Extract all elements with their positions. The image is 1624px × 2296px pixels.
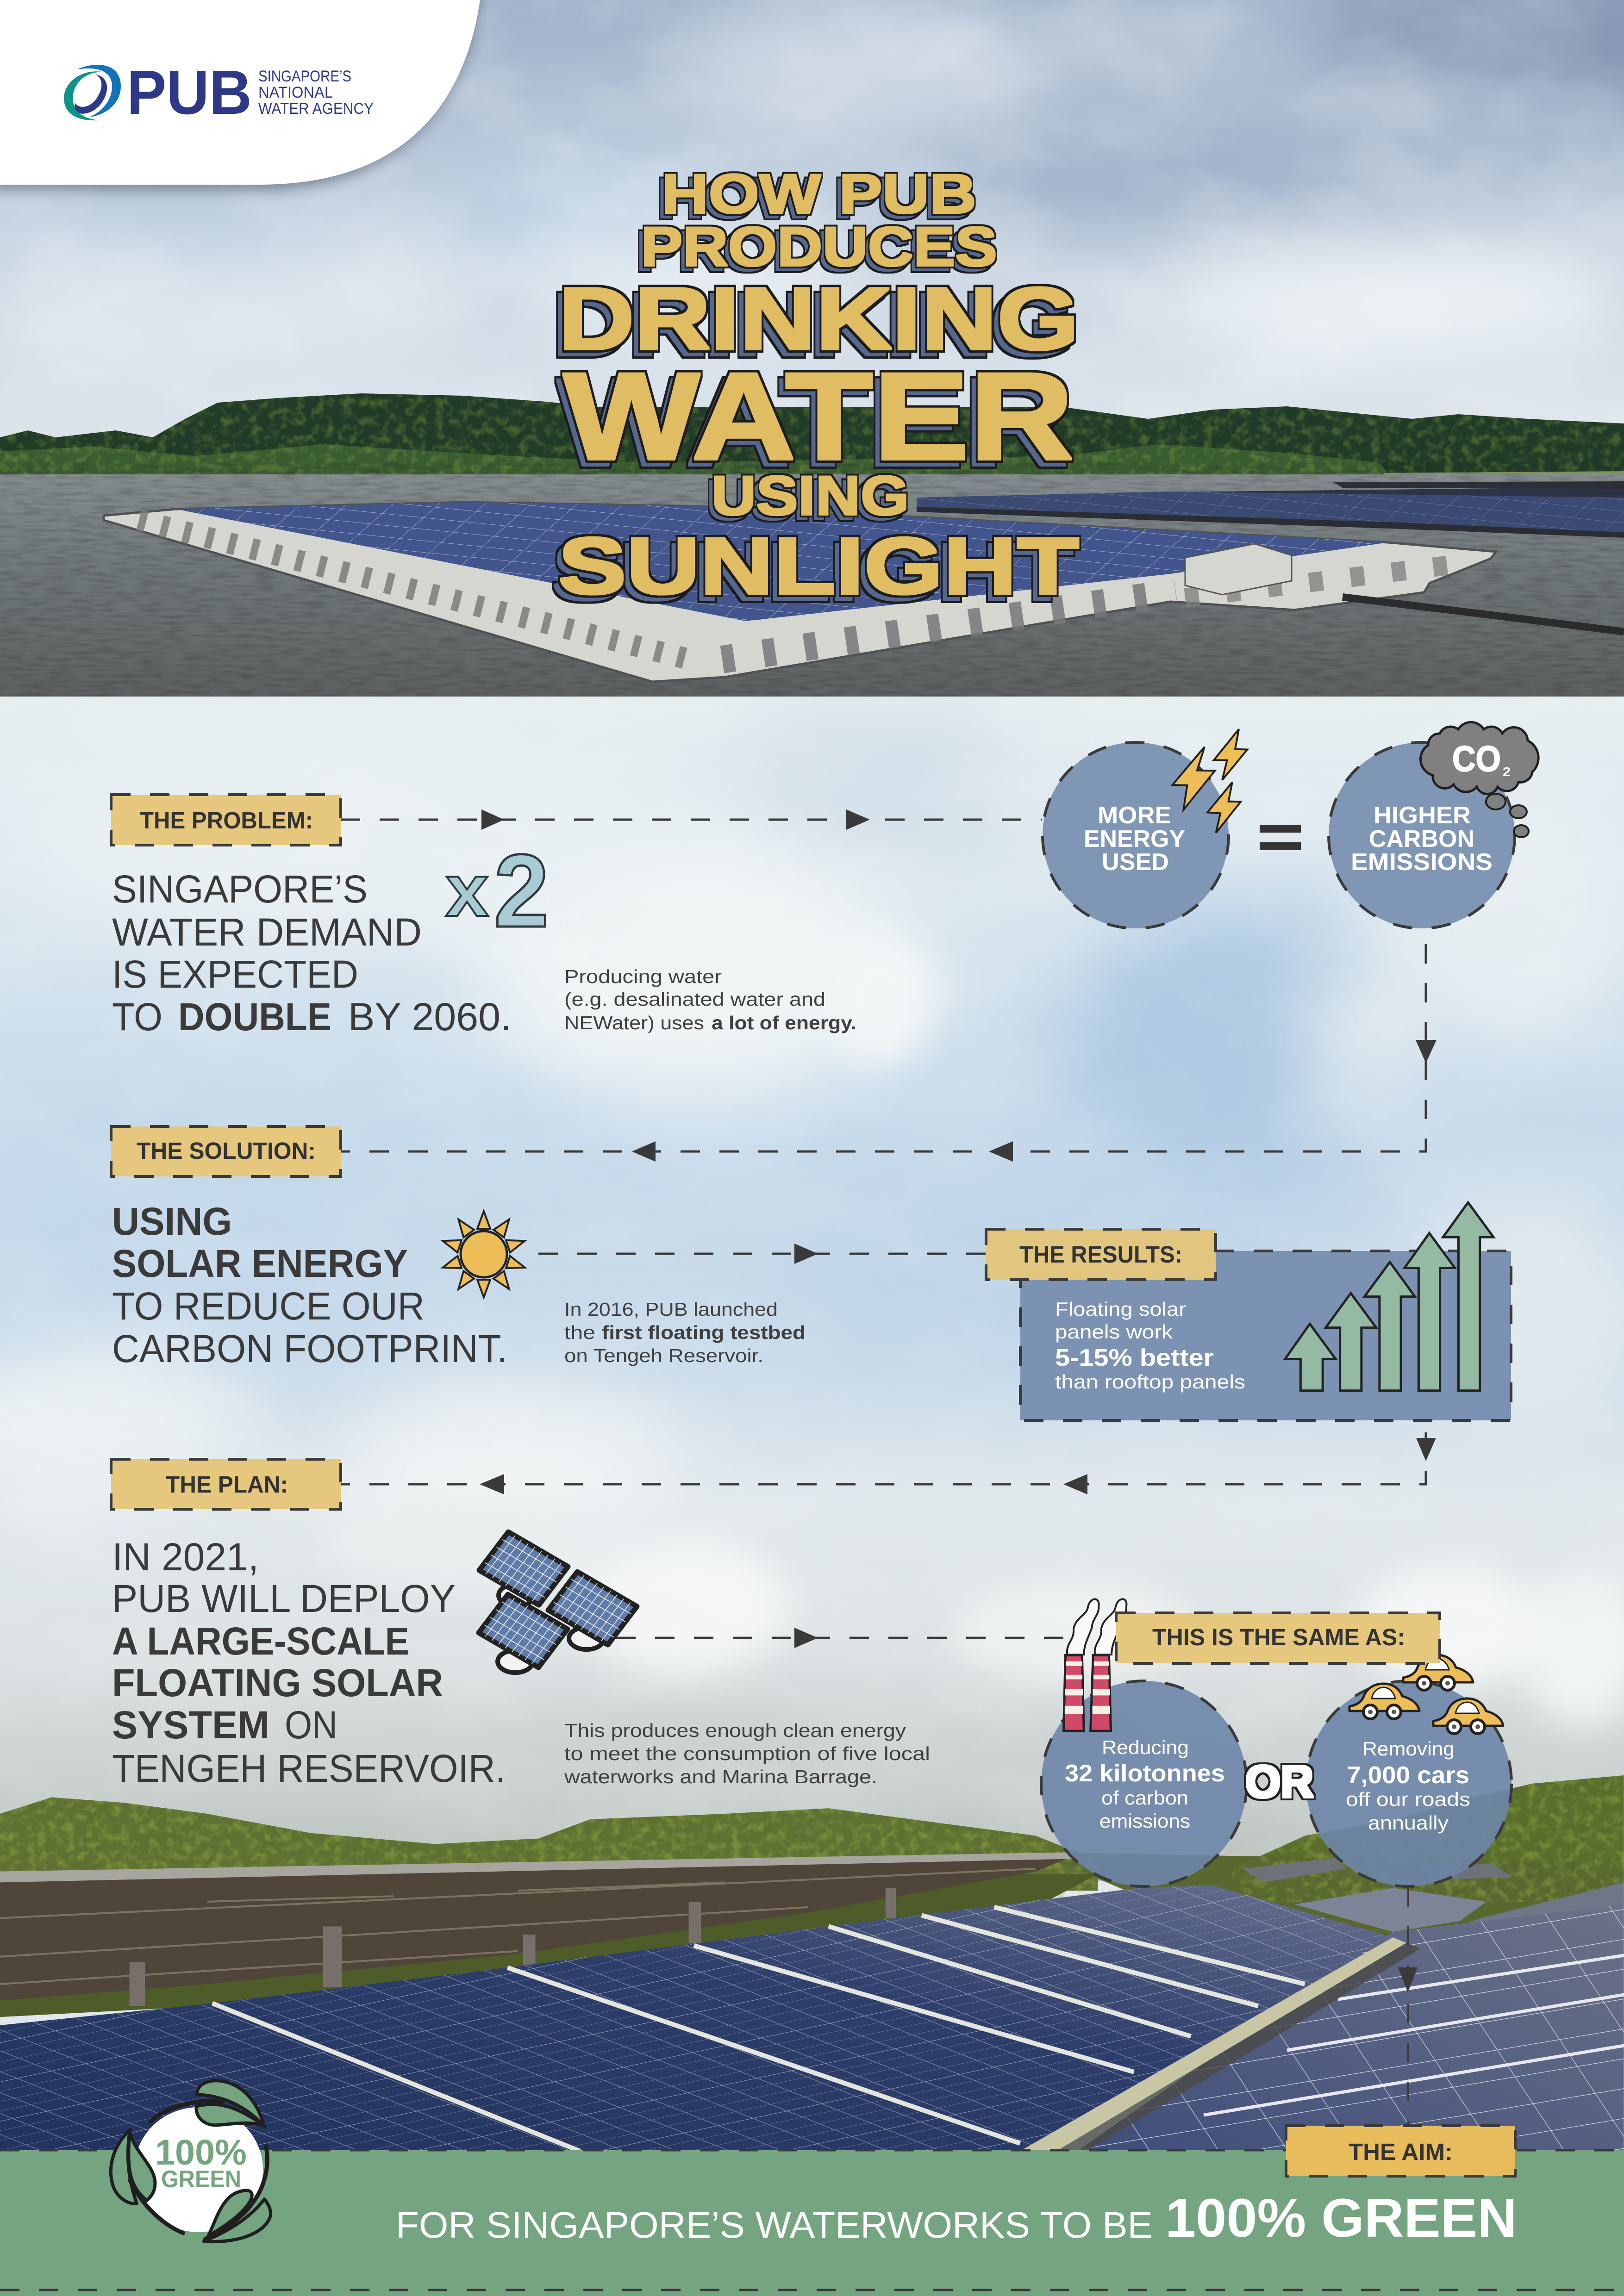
- title line: sunlight: SUNLIGHT: [558, 522, 1079, 610]
- module separators: [212, 1907, 1305, 2151]
- far roof: [1294, 1888, 1486, 1932]
- plan statement: IN 2021,: [112, 1535, 259, 1579]
- title line: how pub: HOW PUB: [662, 163, 976, 225]
- icon: CO2 cloud: [1420, 722, 1538, 837]
- main array cell lines: [0, 1885, 1393, 2151]
- background: sky mid section: [0, 697, 1624, 1881]
- title line: water: WATER: [563, 347, 1074, 485]
- PUB logo rings: [64, 65, 121, 120]
- logo tagline: NATIONAL: [258, 84, 333, 101]
- junction box: [1185, 544, 1292, 595]
- arrow 5: [1443, 1202, 1493, 1391]
- stack 1 bands: [1065, 1661, 1083, 1714]
- title line: drinking: DRINKING: [558, 270, 1079, 368]
- flow line: panels to same-as: [616, 1628, 1065, 1648]
- CO2 text: CO: [1452, 738, 1501, 779]
- arrowhead left: [1063, 1474, 1087, 1494]
- note: testbed: first floating testbed: [602, 1322, 806, 1343]
- label text: THIS IS THE SAME AS:: [1152, 1624, 1405, 1650]
- flow line: cars to aim: [1398, 1887, 1418, 2126]
- arrowhead: [794, 1628, 818, 1648]
- flow line: emissions to solution: [341, 944, 1437, 1162]
- raft far 2: [1176, 487, 1624, 500]
- plan statement: PUB WILL DEPLOY: [112, 1577, 456, 1620]
- clouds: [0, 0, 1624, 375]
- plan statement: FLOATING SOLAR: [112, 1661, 443, 1705]
- green band: [0, 2150, 1624, 2296]
- label box: [1286, 2126, 1515, 2176]
- array rail: [1020, 1937, 1406, 2151]
- label box: [986, 1229, 1216, 1280]
- label box: [1116, 1613, 1440, 1663]
- icon: car: [1433, 1699, 1503, 1734]
- circle text: emissions: [1099, 1810, 1190, 1832]
- label text: THE RESULTS:: [1019, 1241, 1182, 1268]
- leaf top inner: [196, 2104, 264, 2126]
- sun disc: [461, 1231, 507, 1277]
- dashes: [616, 1636, 1065, 1639]
- label box: [111, 1459, 341, 1509]
- solution statement: TO REDUCE OUR: [112, 1284, 425, 1328]
- panel 3: [479, 1594, 568, 1668]
- panel 1: [479, 1532, 568, 1605]
- note: energy use: (e.g. desalinated water and: [564, 989, 825, 1010]
- arrowhead left: [989, 1141, 1013, 1162]
- circle text: HIGHER: [1374, 802, 1471, 829]
- circle text: CARBON: [1369, 826, 1474, 852]
- main solar array: [0, 1885, 1393, 2151]
- note: clean energy: This produces enough clean energy: [564, 1720, 906, 1741]
- arrowhead: [794, 1244, 818, 1264]
- icon: x2: [445, 833, 549, 949]
- results text: 5-15% better: [1055, 1344, 1214, 1371]
- distant array: [1450, 1882, 1624, 1929]
- raft far 1: [917, 492, 1624, 532]
- circle text: annually: [1368, 1812, 1449, 1834]
- aim statement: FOR SINGAPORE’S WATERWORKS TO BE: [396, 2204, 1153, 2246]
- circle text: Reducing: [1102, 1736, 1189, 1758]
- icon: car: [1403, 1655, 1473, 1690]
- subscript: 2: [1503, 765, 1511, 779]
- arrowhead down: [1398, 1967, 1418, 1992]
- circle text: off our roads: [1346, 1788, 1470, 1810]
- dashes: [341, 1432, 1426, 1484]
- problem statement: SINGAPORE’S: [112, 867, 368, 911]
- swoosh left: [130, 2180, 183, 2233]
- label text: THE AIM:: [1349, 2139, 1453, 2165]
- arrowhead down: [1416, 1040, 1437, 1063]
- raft far 1 edge: [917, 507, 1624, 538]
- label: the plan: [111, 1459, 341, 1509]
- x: x: [445, 849, 489, 932]
- problem statement: IS EXPECTED: [112, 952, 358, 996]
- logo panel shadow: [0, 0, 480, 189]
- circle text: of carbon: [1101, 1787, 1188, 1809]
- background: solar farm photo: [0, 1773, 1624, 2151]
- bolt: [1173, 747, 1215, 810]
- problem statement: BY 2060.: [348, 995, 512, 1039]
- floating panel grid: [176, 502, 1388, 621]
- icon: lightning: [1173, 729, 1247, 833]
- badge green: GREEN: [161, 2166, 241, 2193]
- arrowhead left: [480, 1474, 504, 1494]
- note: testbed: on Tengeh Reservoir.: [564, 1345, 763, 1366]
- distant shelter: [1243, 1858, 1512, 1882]
- arrow 4: [1405, 1233, 1455, 1391]
- cloud texture: [0, 0, 1624, 477]
- circle: higher carbon emissions: [1329, 722, 1538, 928]
- circle text: EMISSIONS: [1351, 849, 1493, 876]
- raft far 3: [1333, 481, 1624, 489]
- leaves: [111, 2081, 270, 2242]
- underside beams: [0, 1869, 1036, 1984]
- logo panel: [0, 0, 480, 189]
- leaf left inner: [129, 2130, 155, 2201]
- problem statement: WATER DEMAND: [112, 910, 422, 954]
- hills right: [1232, 1775, 1624, 1902]
- cable: [1343, 597, 1624, 632]
- smoke: [1095, 1599, 1126, 1655]
- blue ring: [77, 65, 121, 117]
- puff: [1510, 805, 1527, 818]
- panel top edge: [0, 1852, 1072, 1882]
- hill foliage: [0, 444, 1389, 474]
- sun rays: [441, 1211, 527, 1297]
- circle text: MORE: [1098, 802, 1171, 829]
- PUB wordmark: PUB: [127, 57, 252, 127]
- results text: Floating solar: [1055, 1298, 1186, 1320]
- hill texture: [0, 391, 1624, 477]
- raft far 1 cells: [917, 492, 1624, 532]
- arrowhead left: [632, 1141, 656, 1162]
- logo tagline: WATER AGENCY: [258, 100, 374, 118]
- clouds white lower: [324, 935, 1624, 1800]
- teal ring: [64, 71, 104, 120]
- dashes: [1407, 1887, 1409, 2126]
- far rafts: [917, 481, 1624, 538]
- panel 2: [548, 1572, 637, 1645]
- note: testbed: In 2016, PUB launched: [564, 1299, 778, 1320]
- label: the problem: [111, 795, 341, 845]
- circle text: 7,000 cars: [1347, 1762, 1469, 1789]
- problem statement: DOUBLE: [178, 995, 331, 1039]
- far bank: [1384, 471, 1624, 477]
- panel base: [569, 1627, 604, 1649]
- stack 2 bands: [1093, 1661, 1110, 1714]
- arrowhead: [846, 809, 870, 830]
- logo tagline: SINGAPORE’S: [258, 68, 351, 85]
- circle: more energy used: [1043, 729, 1247, 928]
- badge disc: [134, 2107, 263, 2232]
- disc: [1329, 742, 1515, 928]
- results text: than rooftop panels: [1055, 1371, 1245, 1393]
- circle text: USED: [1102, 849, 1169, 876]
- plan statement: SYSTEM: [112, 1703, 269, 1747]
- plan statement: A LARGE-SCALE: [112, 1619, 409, 1663]
- label box: [111, 1126, 341, 1176]
- title: [558, 163, 1079, 610]
- note: energy use: Producing water: [564, 966, 722, 987]
- hills left: [0, 1797, 1098, 1891]
- right pontoons: [722, 592, 1176, 660]
- panel base: [499, 1584, 534, 1606]
- circle: reducing carbon: [1041, 1599, 1247, 1886]
- hill texture: [0, 1773, 1624, 1944]
- smoke: [1067, 1599, 1099, 1655]
- icon: solar panels: [479, 1532, 637, 1673]
- right array grid: [1077, 1904, 1624, 2151]
- circle text: Removing: [1362, 1738, 1455, 1760]
- icon: car: [1349, 1684, 1419, 1719]
- support posts: [130, 1888, 896, 2006]
- circle text: ENERGY: [1084, 826, 1185, 852]
- cloud texture mid: [0, 697, 1624, 1807]
- clouds mid: [0, 708, 1624, 1550]
- plan statement: ON: [285, 1703, 337, 1747]
- cloud: [1420, 722, 1538, 794]
- bolt: [1214, 729, 1247, 780]
- arrow 2: [1326, 1293, 1376, 1391]
- circle text: 32 kilotonnes: [1065, 1760, 1225, 1787]
- label: this is the same as: [1116, 1613, 1440, 1663]
- right solar array: [1077, 1904, 1624, 2151]
- puff: [1514, 825, 1529, 837]
- icon: smokestacks: [1063, 1599, 1126, 1731]
- problem statement: TO: [112, 995, 162, 1039]
- arrowhead: [481, 809, 504, 830]
- background: reservoir photo: [0, 0, 1624, 697]
- swoosh top: [150, 2101, 223, 2122]
- panel: the results: [986, 1202, 1511, 1420]
- solution statement: USING: [112, 1200, 232, 1243]
- sky: [0, 0, 1624, 481]
- flow line: problem to energy: [341, 809, 1042, 830]
- label text: THE PLAN:: [166, 1471, 288, 1498]
- floating panels: [176, 502, 1388, 621]
- label: the solution: [111, 1126, 341, 1176]
- water ripples: [0, 477, 1624, 697]
- left pontoons: [139, 520, 690, 660]
- solution statement: SOLAR ENERGY: [112, 1242, 408, 1285]
- disc: [1306, 1681, 1512, 1886]
- sky gradient: [0, 697, 1624, 1881]
- plan statement: TENGEH RESERVOIR.: [112, 1747, 506, 1790]
- OR text: OR: [1245, 1756, 1313, 1807]
- navy crescent: [75, 75, 107, 114]
- leaf bottom outer: [204, 2199, 270, 2242]
- right array bands: [1204, 1955, 1624, 2115]
- swoosh right: [205, 2146, 267, 2239]
- floating platform frame: [104, 502, 1496, 682]
- disc: [1043, 742, 1229, 928]
- results box: [1020, 1251, 1511, 1420]
- arrow 3: [1364, 1262, 1415, 1391]
- title line: using: USING: [711, 465, 909, 527]
- appended pontoons: [1185, 562, 1472, 598]
- note: energy use: a lot of energy.: [712, 1012, 856, 1033]
- logo panel white: [0, 0, 480, 185]
- equals sign: [1260, 825, 1301, 850]
- leaf left: [111, 2130, 137, 2203]
- title line: produces: PRODUCES: [641, 216, 997, 278]
- leaf bottom: [208, 2190, 252, 2236]
- icon: rising arrows: [1285, 1202, 1493, 1391]
- stack 1: [1063, 1655, 1084, 1731]
- disc: [1041, 1681, 1247, 1886]
- flow line: results to plan: [341, 1432, 1436, 1494]
- stack 2: [1091, 1655, 1111, 1731]
- bolt: [1207, 782, 1241, 833]
- flow line: sun to results: [538, 1244, 986, 1264]
- 2: 2: [494, 833, 549, 949]
- label text: THE SOLUTION:: [137, 1138, 316, 1164]
- leaf top: [197, 2081, 264, 2127]
- note: energy use: NEWater) uses: [564, 1012, 704, 1033]
- hills: [0, 393, 1624, 477]
- dashes: [538, 1252, 986, 1255]
- icon: sun: [441, 1211, 527, 1297]
- panel underside: [0, 1857, 1072, 2001]
- badge: 100% green: [111, 2081, 270, 2242]
- panel base: [498, 1650, 533, 1673]
- arrowhead down: [1416, 1438, 1436, 1461]
- water: [0, 474, 1624, 697]
- hill backfill: [1036, 1852, 1624, 1946]
- arrow 1: [1285, 1324, 1336, 1391]
- puff: [1486, 794, 1505, 809]
- note: clean energy: waterworks and Marina Barrage.: [564, 1766, 877, 1787]
- rail shadow: [1056, 1943, 1421, 2151]
- badge 100%: 100%: [155, 2133, 247, 2172]
- dashes: [341, 818, 1042, 821]
- circle: removing cars: [1306, 1655, 1512, 1886]
- note: testbed: the: [564, 1322, 595, 1343]
- results text: panels work: [1055, 1321, 1173, 1343]
- solution statement: CARBON FOOTPRINT.: [112, 1327, 507, 1370]
- label text: THE PROBLEM:: [140, 807, 313, 834]
- vegetation below panels: [0, 1874, 1098, 2017]
- band dashes: [0, 2150, 1624, 2290]
- label box: [111, 795, 341, 845]
- panel: the aim: [0, 2126, 1624, 2296]
- note: clean energy: to meet the consumption of five local: [564, 1743, 930, 1764]
- aim highlight: 100% GREEN: [1165, 2188, 1517, 2249]
- dashes: [341, 944, 1426, 1151]
